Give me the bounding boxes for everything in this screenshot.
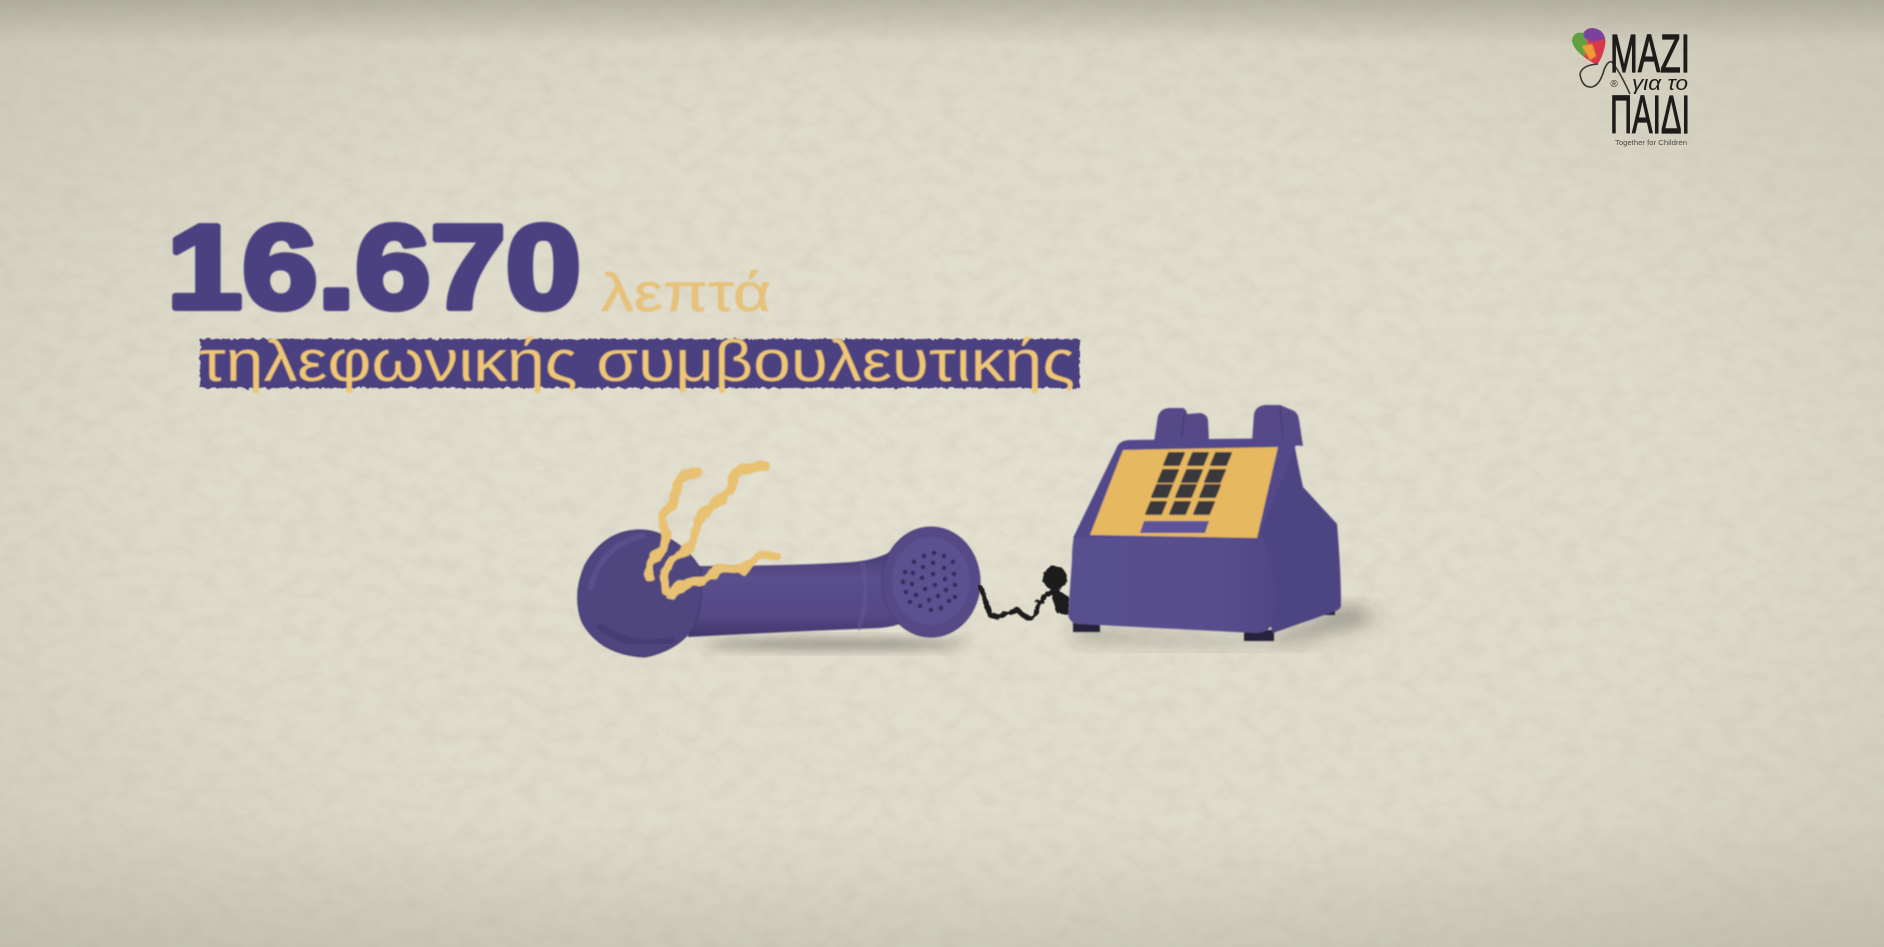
telephone base xyxy=(1068,405,1382,645)
logo word ΠΑΙΔΙ: ΠΑΙΔΙ xyxy=(1610,85,1690,145)
handset handle xyxy=(688,552,905,637)
mouthpiece xyxy=(578,530,702,657)
registered mark: ® xyxy=(1610,79,1618,90)
logo xyxy=(1570,24,1690,147)
logo words για το: για το xyxy=(1632,73,1688,95)
cradle prongs xyxy=(1154,408,1209,442)
yellow keypad panel xyxy=(1090,447,1278,538)
base right side xyxy=(1240,440,1341,633)
subtitle text: τηλεφωνικής συμβουλευτικής xyxy=(199,329,1075,394)
logo tagline: Together for Children xyxy=(1615,140,1687,147)
feet xyxy=(1073,605,1335,641)
keypad buttons xyxy=(1146,453,1231,514)
sound waves xyxy=(649,466,776,595)
sloped face xyxy=(1073,438,1296,538)
telephone handset xyxy=(578,466,980,657)
logo stethoscope line xyxy=(1580,62,1630,94)
subtitle band xyxy=(199,329,1080,394)
logo heart xyxy=(1572,28,1606,65)
logo word MAZI: ΜΑΖΙ xyxy=(1610,24,1690,84)
telephone cord and plug xyxy=(981,566,1068,618)
purple display strip xyxy=(1140,521,1209,533)
plug xyxy=(1043,566,1067,590)
base front xyxy=(1068,530,1274,633)
unit label: λεπτά xyxy=(601,263,771,323)
earpiece holes xyxy=(901,551,957,612)
earpiece xyxy=(882,527,980,637)
handset shadow xyxy=(700,640,970,648)
base shadow xyxy=(1070,605,1382,645)
headline number: 16.670 xyxy=(167,201,581,334)
